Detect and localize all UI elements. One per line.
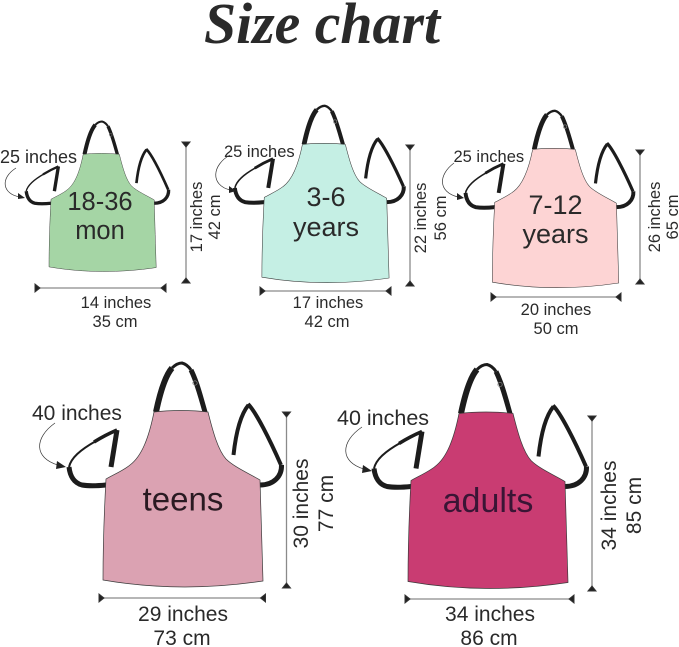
height dimension: 22 inches — [412, 183, 430, 253]
height dimension: 30 inches — [290, 459, 313, 548]
height dimension — [406, 145, 450, 286]
width dimension: 17 inches — [293, 294, 363, 312]
arrow: strap — [5, 168, 25, 199]
height dimension — [588, 416, 646, 591]
apron: mint — [235, 106, 404, 283]
height dimension — [282, 412, 338, 588]
height dimension: 17 inches — [188, 182, 206, 252]
age label — [67, 188, 133, 245]
width dimension: 29 inches — [138, 603, 228, 626]
age label — [522, 190, 589, 249]
height dimension: 34 inches — [598, 461, 621, 550]
height dimension — [182, 142, 224, 283]
age label: years — [522, 219, 589, 249]
arrow: strap — [40, 423, 66, 469]
apron: green — [26, 122, 169, 272]
strap length label: 25 inches — [224, 143, 295, 161]
width dimension — [491, 293, 621, 338]
width dimension — [99, 594, 266, 647]
age label — [293, 182, 359, 242]
height dimension: 56 cm — [432, 196, 450, 240]
strap length label: 40 inches — [337, 406, 429, 430]
height dimension: 42 cm — [206, 195, 224, 239]
apron: pink — [466, 111, 633, 288]
strap length label: 25 inches — [0, 147, 77, 167]
strap length label: 40 inches — [32, 402, 122, 425]
strap length label: 25 inches — [454, 148, 524, 166]
width dimension: 50 cm — [534, 320, 578, 338]
height dimension: 77 cm — [315, 475, 338, 532]
arrow: strap — [442, 163, 464, 200]
panel: teens apron — [32, 363, 338, 647]
age label: 7-12 — [528, 190, 583, 220]
panel: 3-6 years apron — [216, 106, 450, 331]
width dimension: 34 inches — [445, 603, 535, 626]
width dimension: 14 inches — [81, 294, 151, 312]
width dimension — [405, 595, 574, 647]
width dimension: 20 inches — [521, 301, 591, 319]
arrow: strap — [216, 155, 236, 193]
age label: 18-36 — [67, 188, 133, 216]
age label: 3-6 — [306, 182, 346, 212]
age label: mon — [75, 217, 125, 245]
width dimension: 35 cm — [93, 313, 137, 331]
age label: adults — [443, 482, 533, 520]
height dimension — [636, 150, 679, 284]
panel: 18-36 mon apron — [0, 122, 224, 331]
panel: 7-12 years apron — [442, 111, 679, 338]
age label: years — [293, 212, 359, 242]
apron: rose — [69, 363, 282, 587]
width dimension — [35, 284, 166, 331]
width dimension — [260, 287, 391, 331]
width dimension: 42 cm — [305, 313, 349, 331]
panel: adults apron — [337, 364, 646, 647]
arrow: strap — [346, 427, 372, 473]
apron: magenta — [374, 364, 587, 588]
height dimension: 85 cm — [623, 477, 646, 534]
age label: teens — [143, 480, 223, 518]
height dimension: 26 inches — [646, 182, 664, 252]
